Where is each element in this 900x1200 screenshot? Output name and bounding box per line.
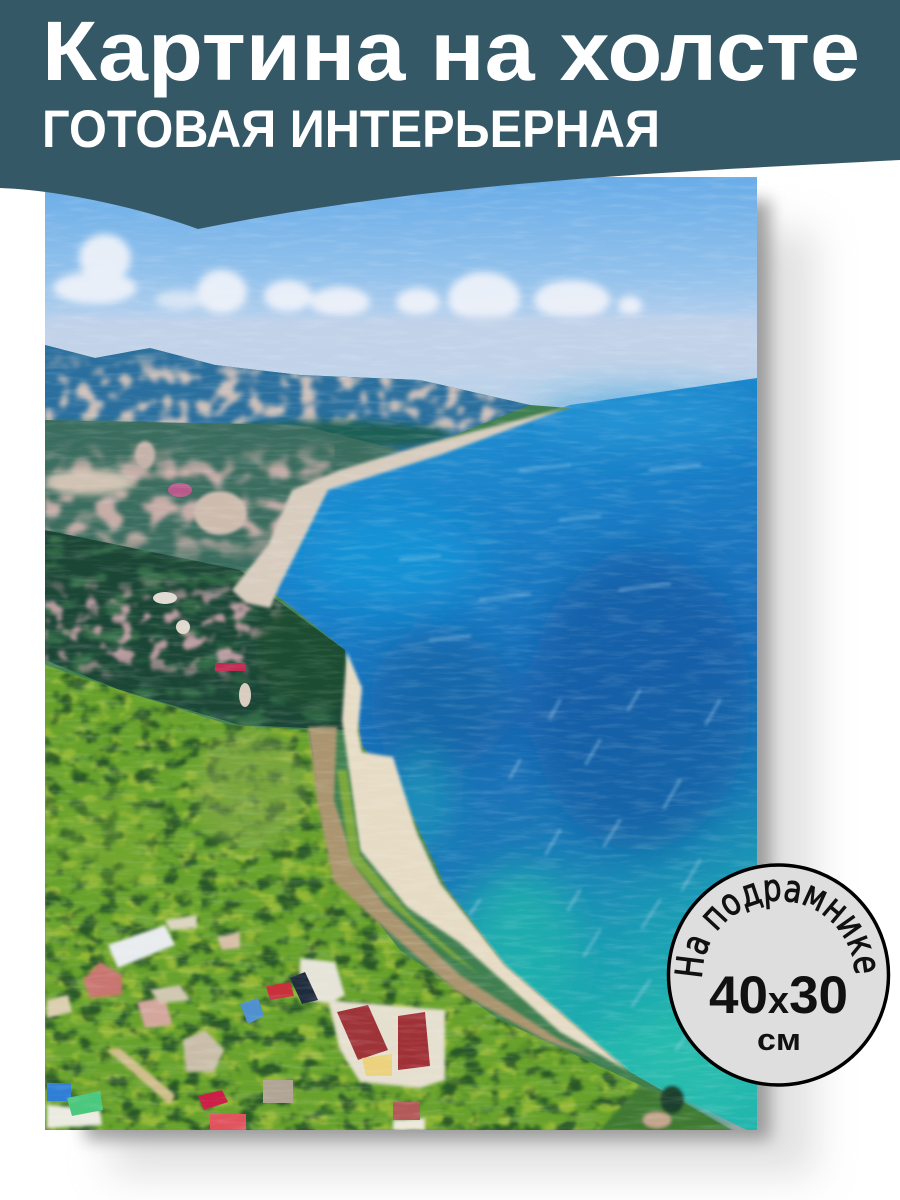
sea brush strokes bbox=[400, 465, 720, 1050]
badge arc label: На подрамнике bbox=[674, 879, 876, 977]
village houses bbox=[47, 915, 445, 1130]
title: Картина на холсте bbox=[42, 4, 860, 98]
bright green slope bbox=[45, 660, 755, 1140]
size badge bbox=[634, 863, 890, 1087]
header ribbon bbox=[0, 0, 900, 229]
painting: coastal landscape bbox=[30, 177, 760, 1140]
sea colour patches bbox=[300, 395, 760, 1120]
coast sand, beach and road bbox=[232, 406, 630, 1072]
badge size: 40x30 bbox=[709, 966, 848, 1025]
mid-slope town bbox=[45, 420, 400, 572]
sky bbox=[45, 177, 757, 427]
dark forest belt with houses bbox=[45, 530, 346, 730]
clouds bbox=[53, 234, 642, 324]
badge unit: см bbox=[757, 1022, 801, 1057]
haze band bbox=[48, 314, 754, 326]
land base bbox=[45, 345, 740, 1135]
sea bbox=[270, 378, 757, 1135]
canvas drop shadow bbox=[85, 200, 815, 1175]
subtitle: ГОТОВАЯ ИНТЕРЬЕРНАЯ bbox=[42, 100, 660, 159]
far right headland bbox=[600, 1085, 735, 1132]
paint texture bbox=[45, 177, 757, 1130]
distant city hills bbox=[45, 345, 530, 459]
